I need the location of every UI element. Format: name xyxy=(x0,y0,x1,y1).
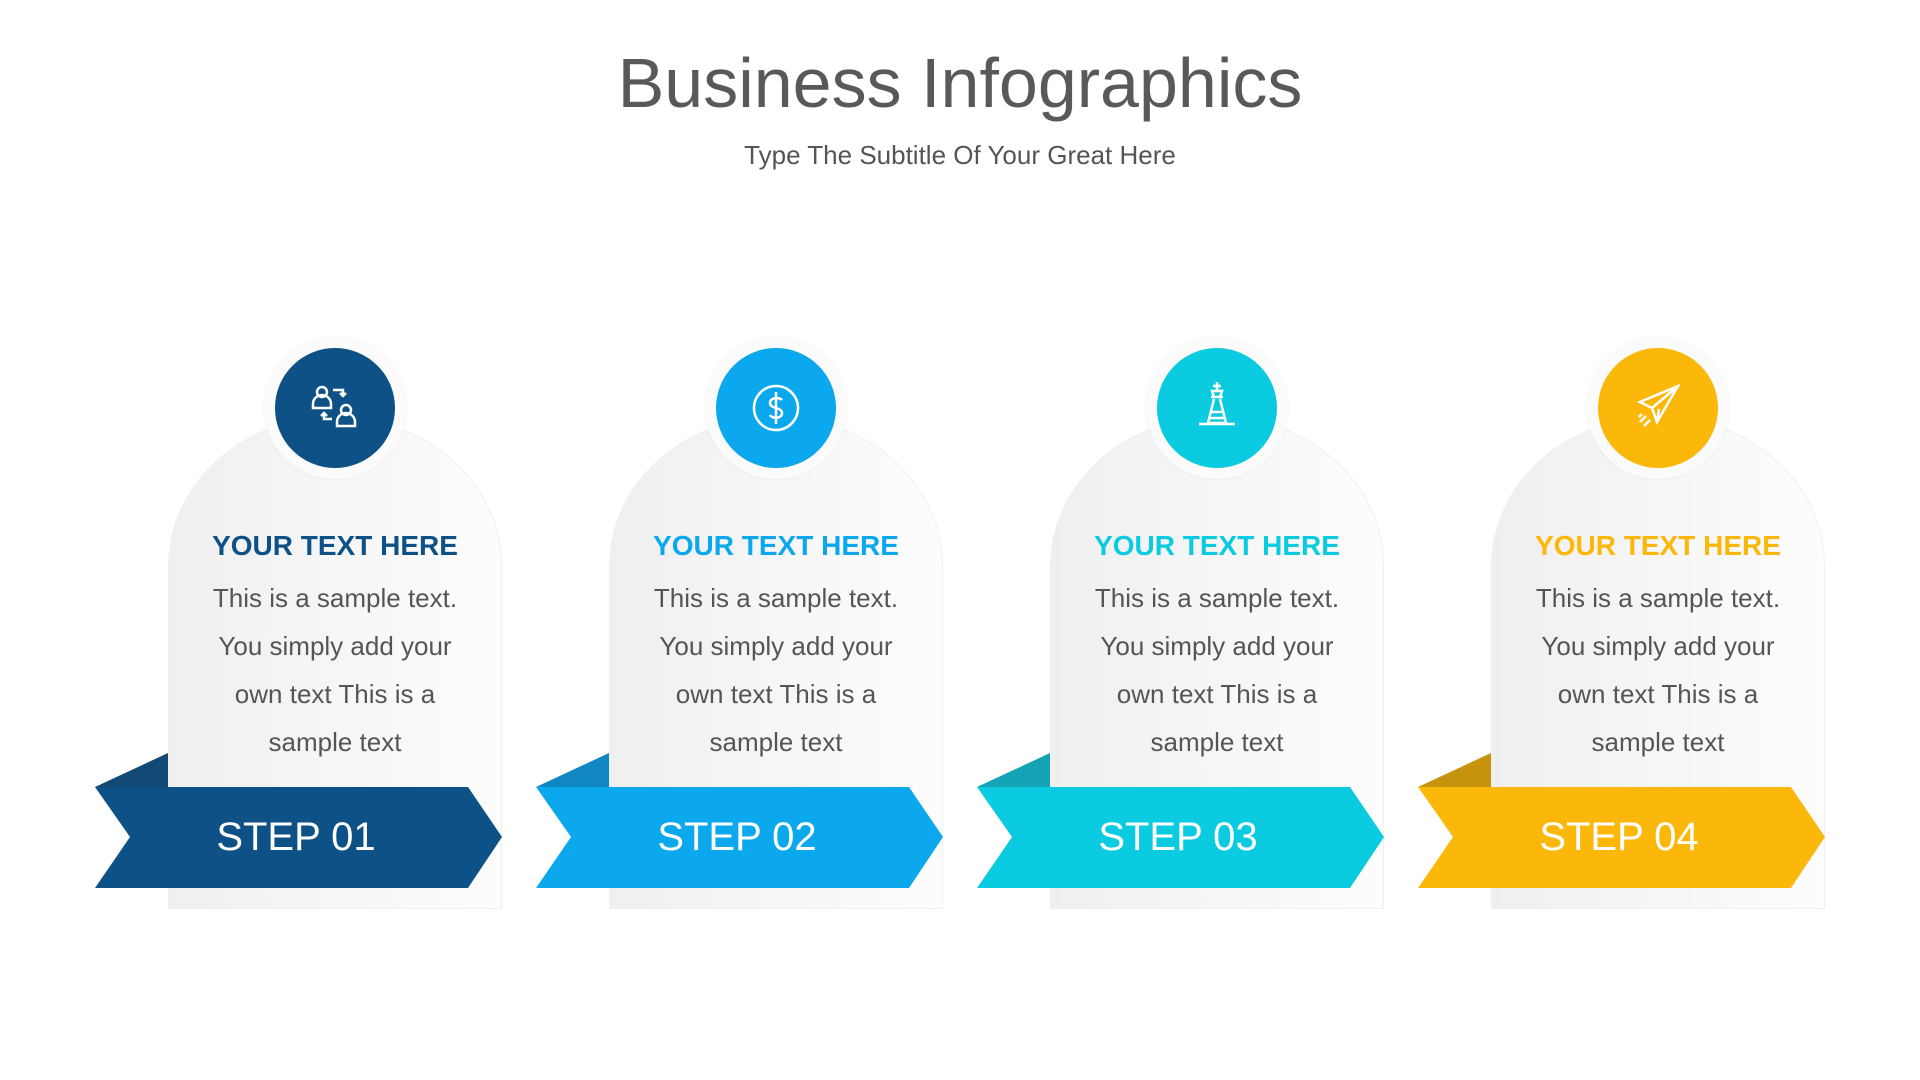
icon: dollar xyxy=(716,348,836,468)
text block xyxy=(1095,583,1339,757)
text block: You simply add your xyxy=(659,631,893,661)
text block: own text This is a xyxy=(676,679,876,709)
text block xyxy=(213,583,457,757)
label: STEP 02: STEP 02 xyxy=(657,815,817,859)
text block xyxy=(654,583,898,757)
text block: own text This is a xyxy=(1117,679,1317,709)
panel: step 02 xyxy=(536,348,943,909)
text block: This is a sample text. xyxy=(1095,583,1339,613)
panel: step 01 xyxy=(95,348,502,909)
panel: step 03 xyxy=(977,348,1384,909)
text block: You simply add your xyxy=(218,631,452,661)
subtitle: Type The Subtitle Of Your Great Here xyxy=(744,140,1176,170)
panel: step 04 xyxy=(1418,348,1825,909)
ribbon: step 02 xyxy=(536,753,943,888)
text block: sample text xyxy=(1592,727,1724,757)
ribbon: step 03 xyxy=(977,753,1384,888)
text block: This is a sample text. xyxy=(1536,583,1780,613)
text block: You simply add your xyxy=(1100,631,1334,661)
icon: chess king xyxy=(1157,348,1277,468)
icon: paper plane xyxy=(1598,348,1718,468)
label: STEP 03: STEP 03 xyxy=(1098,815,1258,859)
text block: own text This is a xyxy=(235,679,435,709)
text block: sample text xyxy=(269,727,401,757)
text block: own text This is a xyxy=(1558,679,1758,709)
heading: YOUR TEXT HERE xyxy=(212,530,458,561)
ribbon: step 01 xyxy=(95,753,502,888)
heading: YOUR TEXT HERE xyxy=(653,530,899,561)
text block: You simply add your xyxy=(1541,631,1775,661)
text block: sample text xyxy=(710,727,842,757)
title: Business Infographics xyxy=(618,44,1302,122)
heading: YOUR TEXT HERE xyxy=(1094,530,1340,561)
heading: YOUR TEXT HERE xyxy=(1535,530,1781,561)
ribbon: step 04 xyxy=(1418,753,1825,888)
text block xyxy=(1536,583,1780,757)
label: STEP 04: STEP 04 xyxy=(1539,815,1699,859)
text block: This is a sample text. xyxy=(213,583,457,613)
label: STEP 01: STEP 01 xyxy=(216,815,376,859)
icon: people exchange xyxy=(275,348,395,468)
text block: This is a sample text. xyxy=(654,583,898,613)
text block: sample text xyxy=(1151,727,1283,757)
